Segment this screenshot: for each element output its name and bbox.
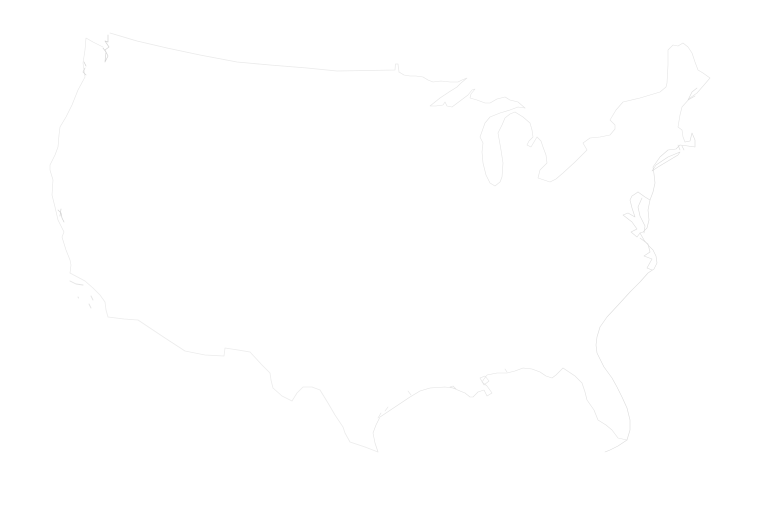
San Francisco Bay <box>58 209 64 222</box>
Channel Islands <box>70 281 93 308</box>
southern border: Texas to California <box>70 273 378 452</box>
Gulf coast: Florida to Texas <box>373 368 627 452</box>
west coast: California to Washington <box>50 38 103 273</box>
Puget Sound <box>83 35 109 75</box>
Atlantic coast with Cape Cod, Long Island and Chesapeake Bay <box>596 88 697 452</box>
northern border: Washington to Minnesota <box>110 33 399 72</box>
Great Lakes and Canadian border <box>399 43 710 186</box>
